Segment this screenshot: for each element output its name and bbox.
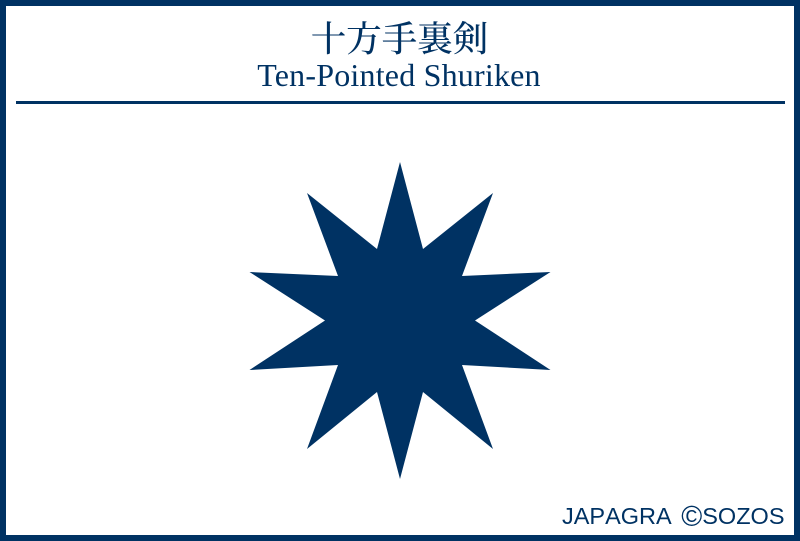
header rule xyxy=(16,101,785,104)
title: Japanese: 十方手裏剣 xyxy=(311,11,488,62)
title: English: Ten-Pointed Shuriken xyxy=(257,57,541,93)
credit: JAPAGRA ©SOZOS xyxy=(562,501,784,533)
